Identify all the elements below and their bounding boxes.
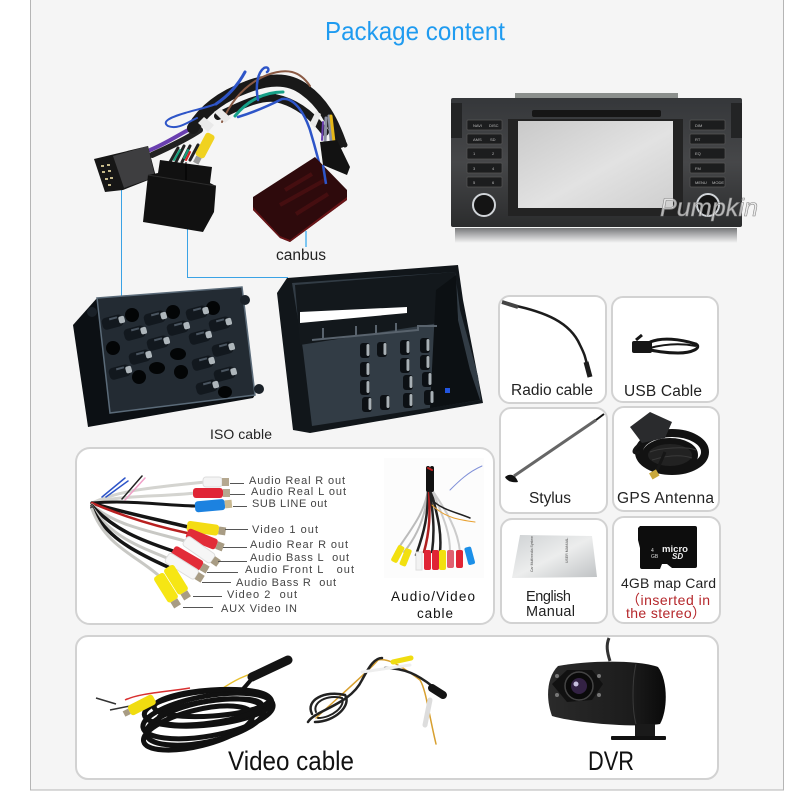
button captions: SD [490, 137, 496, 142]
english manual label: English [526, 589, 571, 605]
gps antenna label: GPS Antenna [617, 490, 714, 507]
video cable label: Video cable [228, 746, 354, 776]
button captions: DISC [489, 123, 499, 128]
leader lines [183, 484, 248, 608]
wiring harness with canbus [94, 67, 350, 297]
title: Package content [325, 16, 506, 46]
map card label: 4GB map Card [621, 575, 716, 591]
radio cable label: Radio cable [511, 382, 593, 399]
ISO cable label: ISO cable [210, 426, 272, 442]
icon: micro sd card: 4 [651, 548, 654, 554]
button captions: 1 [473, 151, 476, 156]
button captions: DIM [695, 123, 702, 128]
connector labels: Video 2 out [227, 589, 297, 601]
connector labels [221, 475, 354, 615]
button captions: EQ [695, 151, 701, 156]
icon: usb cable [632, 335, 698, 353]
connector labels: Video 1 out [252, 524, 318, 536]
slim video cable [308, 658, 443, 744]
panel: stylus [500, 408, 607, 513]
button captions: 4 [492, 166, 495, 171]
side vents [451, 103, 742, 138]
left buttons [467, 120, 502, 187]
panel: audio/video cable [76, 448, 494, 624]
panel: map card [613, 517, 720, 623]
dvr camera [548, 638, 666, 740]
ISO connector left [73, 287, 264, 427]
icon: radio cable [502, 302, 590, 377]
button captions: MENU [695, 180, 707, 185]
panel: english manual [501, 519, 607, 623]
connector labels: Audio Real L out [251, 486, 346, 498]
canbus box [253, 157, 347, 242]
button captions: RT [695, 137, 701, 142]
screen [518, 121, 673, 208]
button captions: 5 [473, 180, 476, 185]
panel: radio cable [499, 296, 606, 403]
panel: gps antenna [613, 407, 719, 511]
icon: micro sd card: GB [651, 554, 659, 560]
button captions: 3 [473, 166, 476, 171]
button captions: FM [695, 166, 701, 171]
button captions: NAVI [473, 123, 482, 128]
top chassis [515, 93, 678, 99]
audio/video harness image [384, 458, 484, 578]
icon: gps antenna [630, 412, 705, 479]
ISO connector right [277, 265, 483, 433]
RCA wires [92, 476, 205, 575]
head unit stereo [451, 93, 758, 243]
RCA plugs [153, 477, 232, 610]
pumpkin watermark: Pumpkin [660, 194, 758, 222]
connector labels: SUB LINE out [252, 498, 327, 510]
icon: micro sd card: micro [662, 544, 689, 554]
leader line: big connector to ISO [188, 228, 288, 278]
button captions: MODE [712, 180, 724, 185]
yellow video plug [122, 694, 157, 719]
button captions: 2 [492, 151, 495, 156]
yellow RCA plug [191, 132, 216, 166]
leader line: left connector to ISO [120, 186, 122, 297]
canbus label: canbus [276, 247, 326, 264]
icon: micro sd card: SD [672, 552, 683, 561]
cable label: cable [417, 606, 453, 621]
right buttons [690, 120, 725, 187]
connector labels: Audio Bass R out [236, 577, 336, 589]
connector labels: Audio Bass L out [250, 552, 349, 564]
faceplate [451, 98, 742, 227]
icon: stylus [505, 414, 604, 482]
panel: video cable and DVR [76, 636, 718, 779]
inserted note line 1: （inserted in [626, 592, 710, 608]
left knob [473, 194, 495, 216]
big black connector [143, 160, 216, 232]
small white connector [320, 140, 350, 175]
usb cable label: USB Cable [624, 383, 702, 400]
icon: manual [512, 535, 597, 578]
wire labels [198, 108, 321, 132]
connector labels: Audio Rear R out [250, 539, 348, 551]
connector labels: Audio Real R out [249, 475, 345, 487]
right knob [697, 194, 719, 216]
manual label: Manual [526, 604, 575, 620]
icon: manual: USER MANUAL [565, 538, 569, 563]
leader line: canbus [305, 231, 307, 247]
panel: usb cable [612, 297, 718, 402]
icon: micro sd card [638, 526, 697, 569]
button captions [473, 123, 724, 185]
audio/video label: Audio/Video [391, 589, 475, 604]
connector labels: Audio Front L out [245, 564, 354, 576]
button captions: AMS [473, 137, 482, 142]
left round connector [94, 146, 156, 192]
button captions: 6 [492, 180, 495, 185]
DVR label: DVR [588, 746, 634, 776]
coiled video cable [96, 660, 288, 759]
icon: manual: Car Multimedia System [530, 536, 534, 572]
screen frame [508, 119, 683, 216]
reflection [455, 228, 737, 243]
stylus label: Stylus [529, 490, 571, 507]
harness wires [150, 67, 345, 184]
cd slot [532, 110, 661, 117]
connector labels: AUX Video IN [221, 603, 297, 615]
inserted note line 2: the stereo） [626, 605, 706, 621]
